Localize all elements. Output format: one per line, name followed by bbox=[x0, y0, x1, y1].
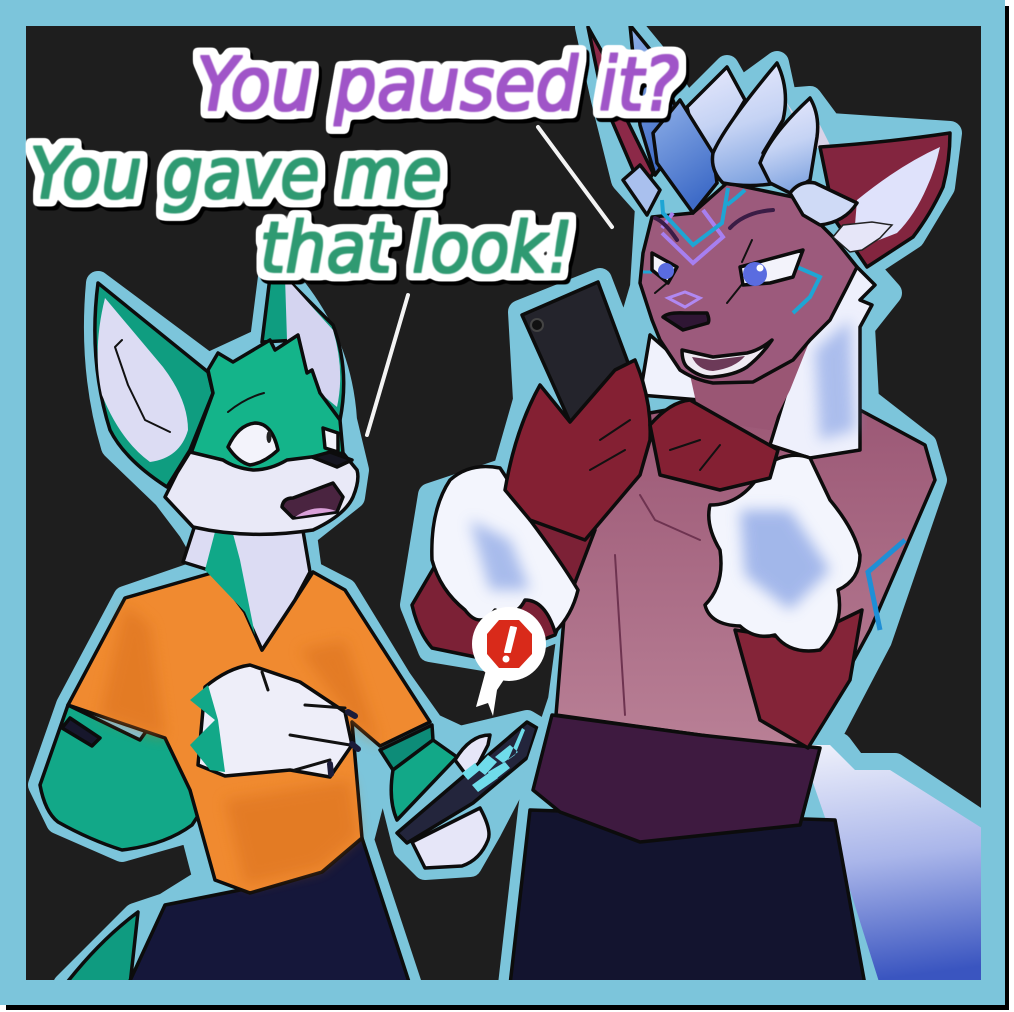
fox trousers bbox=[128, 838, 410, 985]
bubble circle bbox=[472, 607, 546, 681]
left ear fur bbox=[115, 340, 170, 432]
ear fluff bbox=[833, 222, 892, 252]
left cheek tattoo bbox=[643, 270, 652, 274]
creature far arm bbox=[412, 500, 595, 660]
torso center line bbox=[615, 495, 700, 715]
fox tail bbox=[65, 912, 138, 985]
right cheek tattoo bbox=[793, 267, 820, 313]
fox right arm bbox=[391, 740, 457, 820]
wrist fur bbox=[190, 685, 225, 772]
near cuff shading bbox=[740, 510, 830, 610]
fox far eye bbox=[323, 428, 338, 452]
exclamation dot bbox=[502, 656, 510, 662]
creature ear inner bbox=[853, 147, 940, 250]
creature near arm bbox=[735, 610, 862, 748]
hair spike one bbox=[687, 67, 745, 183]
mouth interior bbox=[692, 356, 745, 371]
creature torso bbox=[556, 390, 935, 750]
bubble tail bbox=[476, 670, 505, 716]
finger lines bbox=[590, 420, 720, 470]
fox left arm bbox=[38, 704, 197, 852]
front horn bbox=[653, 100, 717, 213]
fox mouth bbox=[282, 483, 343, 518]
creature neck bbox=[690, 340, 810, 430]
creature phone bbox=[522, 282, 630, 422]
creature left eye bbox=[652, 253, 677, 283]
sleeve cuff bbox=[380, 725, 433, 770]
fox outline halo bbox=[40, 277, 537, 985]
creature tail bbox=[812, 745, 981, 980]
fox shirt bbox=[68, 572, 430, 893]
far cuff shading bbox=[470, 520, 530, 590]
speech line: green speaker bbox=[367, 295, 408, 435]
alert bubble bbox=[472, 607, 546, 716]
hair spike three bbox=[760, 98, 818, 193]
fox hand on chest bbox=[198, 665, 352, 777]
hair spike two bbox=[712, 63, 785, 186]
hair blue shading bbox=[815, 320, 855, 440]
face scars and muzzle lines bbox=[655, 240, 752, 303]
speech line: purple speaker bbox=[538, 127, 612, 227]
right ear inner bbox=[285, 277, 340, 407]
hair tuft bbox=[790, 182, 857, 225]
character: green fox bbox=[40, 277, 537, 985]
holding hand bbox=[505, 360, 650, 540]
arm band bbox=[62, 718, 100, 746]
fox pupil bbox=[266, 431, 272, 443]
exclamation mark bbox=[505, 627, 516, 652]
caption: You gave me: You gave me bbox=[30, 133, 442, 215]
neck green patch bbox=[205, 528, 255, 635]
fox neck bbox=[183, 525, 310, 650]
fingers bbox=[262, 672, 350, 770]
left iris bbox=[658, 263, 674, 279]
under-horn tuft bbox=[623, 165, 660, 215]
hand behind phone bbox=[412, 735, 490, 868]
left ear inner bbox=[98, 298, 188, 462]
red octagon bbox=[487, 620, 532, 668]
brow line bbox=[228, 393, 264, 412]
shirt shading bbox=[100, 605, 380, 885]
fox eye bbox=[228, 423, 278, 465]
fox head green bbox=[190, 335, 343, 478]
white hair right bbox=[770, 267, 875, 458]
creature right eye bbox=[740, 250, 803, 285]
near arm blue tattoo bbox=[868, 540, 905, 630]
near fur cuff bbox=[705, 455, 860, 651]
nose tattoo bbox=[668, 292, 700, 307]
far fur cuff bbox=[432, 466, 578, 632]
caption: You paused it?: You paused it? bbox=[197, 42, 679, 128]
fox tongue bbox=[295, 508, 336, 517]
fox nose bbox=[312, 452, 352, 467]
other hand bbox=[650, 400, 778, 490]
fox nails bbox=[330, 712, 358, 774]
right iris bbox=[743, 262, 767, 286]
creature belt bbox=[533, 715, 820, 842]
second horn bbox=[630, 25, 690, 175]
fox phone bbox=[397, 722, 537, 843]
creature nose bbox=[663, 313, 709, 330]
back horn bbox=[588, 27, 653, 193]
phone screen icons bbox=[462, 728, 525, 792]
eye highlight bbox=[756, 264, 764, 272]
fox white face bbox=[165, 452, 358, 534]
fox right ear bbox=[262, 277, 344, 420]
forehead tattoo purple bbox=[662, 210, 723, 263]
creature brows bbox=[655, 210, 773, 240]
creature outline halo bbox=[412, 25, 985, 985]
creature head bbox=[640, 183, 857, 383]
back spikes bbox=[785, 100, 830, 150]
creature trousers bbox=[510, 810, 865, 985]
white hair left bbox=[640, 335, 700, 400]
caption: that look!: that look! bbox=[260, 207, 573, 289]
creature ear bbox=[820, 133, 950, 267]
character: horned mauve creature bbox=[412, 25, 985, 985]
fox left ear bbox=[95, 283, 213, 487]
phone camera bbox=[531, 319, 543, 331]
creature mouth bbox=[682, 340, 772, 377]
forehead tattoo blue bbox=[662, 188, 745, 245]
